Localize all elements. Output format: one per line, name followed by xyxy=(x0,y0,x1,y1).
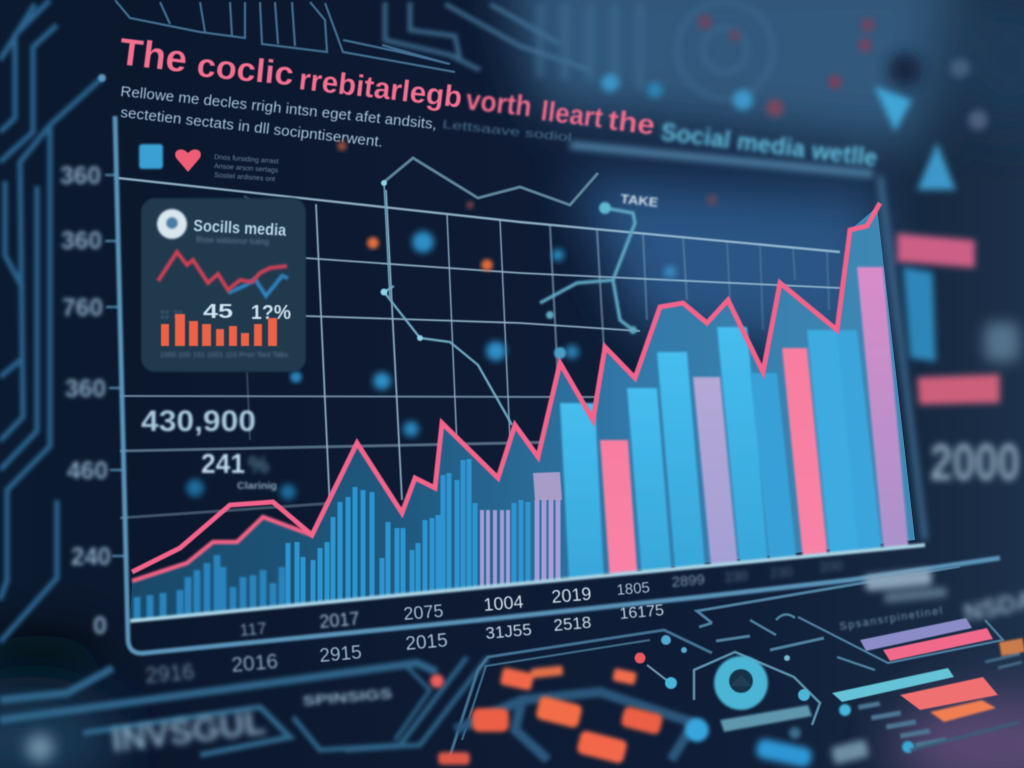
x axis labels row one: 2019 xyxy=(551,584,592,607)
chart right frame xyxy=(880,176,925,540)
pink bar xyxy=(883,628,993,661)
legend text: Sostiel ardisnes ont xyxy=(214,172,275,183)
x axis labels row one: 2075 xyxy=(403,601,444,624)
x axis baseline xyxy=(130,545,925,621)
panel: right side stats xyxy=(897,233,1020,492)
panel: left bottom plate xyxy=(0,657,488,755)
x axis labels row two: 2016 xyxy=(230,650,279,677)
x axis labels row one xyxy=(239,557,844,640)
x axis labels row two: 2916 xyxy=(144,659,195,688)
x axis labels row one: 117 xyxy=(239,619,267,640)
icon: heart xyxy=(175,149,201,172)
circuit traces: top center xyxy=(385,2,590,70)
x axis labels row two: 2518 xyxy=(553,613,592,635)
percent stat: 241 xyxy=(201,448,245,479)
hub icon xyxy=(694,652,820,732)
x axis labels row two: 31J55 xyxy=(485,620,533,643)
area under trend line xyxy=(130,207,915,625)
panel: bottom right xyxy=(697,566,1024,753)
card stats xyxy=(160,301,291,324)
title end: Social media wetlle xyxy=(659,118,879,173)
panel: bottom circuit board xyxy=(438,630,870,768)
panel caption text: Spsansrpinetinel xyxy=(839,605,943,633)
panel outline xyxy=(697,566,1003,670)
x axis labels row one: 1004 xyxy=(483,592,524,615)
board small node xyxy=(789,727,801,739)
lavender striped bar one xyxy=(479,509,511,587)
x axis labels row one: 1805 xyxy=(616,579,651,599)
chart grid xyxy=(118,178,840,518)
year tag: TAKE xyxy=(620,191,659,210)
hub blue node xyxy=(685,718,709,742)
circuit traces: top right xyxy=(677,2,773,98)
legend text xyxy=(214,154,279,183)
panel heading blur xyxy=(864,568,947,603)
y axis labels: 360 xyxy=(65,375,106,403)
thin bars: middle group xyxy=(285,458,531,606)
secondary line chart: right xyxy=(540,202,637,359)
icon: social square xyxy=(139,144,163,169)
trend line: lower xyxy=(132,517,312,581)
title continuation: vorth xyxy=(464,84,533,123)
title: coclic xyxy=(195,46,295,92)
card stats: 45 xyxy=(203,301,233,323)
teal bar xyxy=(832,668,954,702)
card heading: Socills media xyxy=(193,216,287,240)
x axis labels row one: 200 xyxy=(819,557,844,575)
intro text: Rellowe me decles rrigh intsn eget afet andsits, xyxy=(120,83,438,133)
secondary line chart xyxy=(380,158,598,425)
title: The xyxy=(117,31,190,81)
y axis labels: 460 xyxy=(67,457,108,485)
glow panel xyxy=(984,322,1020,362)
title xyxy=(117,31,464,115)
board grey chip xyxy=(830,739,870,765)
lavender bar xyxy=(860,618,972,651)
card subheading: Bsse sstissnur tuiing xyxy=(196,235,269,247)
card red line xyxy=(158,252,287,290)
bottom left glow xyxy=(26,734,54,762)
stripes haze xyxy=(540,4,640,90)
y axis labels xyxy=(60,162,111,640)
x axis labels row two: 2015 xyxy=(405,630,449,655)
circuit traces: left edge xyxy=(0,0,102,642)
card icon xyxy=(157,209,187,239)
plate node xyxy=(430,674,444,688)
blue column xyxy=(903,267,936,362)
plate heading: INVSGUL xyxy=(109,703,268,760)
left trace end node xyxy=(98,74,106,82)
card blue line xyxy=(228,276,288,296)
board connectors xyxy=(634,635,687,689)
title continuation: lleart xyxy=(539,95,605,134)
card stats: :: :: xyxy=(160,305,183,321)
left axis line xyxy=(105,116,1000,653)
card stats: 1?% xyxy=(251,302,291,324)
orange bar xyxy=(930,700,996,722)
y axis labels: 240 xyxy=(71,543,111,571)
pink label bar two xyxy=(917,374,1000,405)
y axis labels: 760 xyxy=(62,294,103,322)
y axis labels: 0 xyxy=(93,612,107,640)
board inner ring xyxy=(455,692,694,760)
x axis labels row two xyxy=(144,602,665,688)
y axis labels: 360 xyxy=(60,162,101,190)
stat caption: Clarinig xyxy=(237,481,277,492)
x axis labels row one: 230 xyxy=(724,567,749,585)
intro text: Lettsaave sodiol xyxy=(442,117,572,145)
title continuation xyxy=(464,84,657,141)
plate label: SPINSIGS xyxy=(302,685,393,710)
x axis labels row two: 2915 xyxy=(319,642,363,667)
legend text: Ansoe arson sertags xyxy=(214,163,279,175)
board orange chips xyxy=(438,665,664,765)
list with nodes xyxy=(839,638,1024,753)
salmon bar xyxy=(900,677,998,710)
chart top band xyxy=(570,145,873,174)
tall bars xyxy=(558,266,910,578)
intro text xyxy=(120,83,572,151)
legend text: Dnos fursiding arrast xyxy=(214,154,279,166)
big stat: 430,900 xyxy=(141,405,256,438)
panel: social media card xyxy=(141,198,306,372)
title: rrebitarlegb xyxy=(297,63,464,115)
floating data dots xyxy=(186,141,717,500)
pink label bar xyxy=(897,233,975,268)
board blue pill xyxy=(755,737,813,768)
title continuation: the xyxy=(606,104,657,141)
board outline xyxy=(448,630,712,762)
bar chart xyxy=(130,207,917,640)
y axis labels: 360 xyxy=(61,227,102,255)
decorative glows: top right xyxy=(601,15,988,190)
x axis labels row one: 2899 xyxy=(671,571,706,591)
x axis labels row one: 2017 xyxy=(319,609,360,632)
intro text: sectetien sectats in dll socipntiserwent. xyxy=(120,104,384,151)
card axis text: 1000 100 101 1001 110 Pron Tant Tabs xyxy=(160,352,288,359)
card bars xyxy=(161,314,277,346)
lavender striped bar two xyxy=(532,471,563,582)
x axis labels row one: 230 xyxy=(769,563,794,581)
circuit traces: top xyxy=(115,0,455,72)
percent stat xyxy=(201,448,269,479)
x axis labels row two: 16175 xyxy=(619,602,665,623)
percent stat: % xyxy=(248,452,269,479)
thin bars: left group xyxy=(132,554,286,620)
trend line: main xyxy=(132,203,880,572)
